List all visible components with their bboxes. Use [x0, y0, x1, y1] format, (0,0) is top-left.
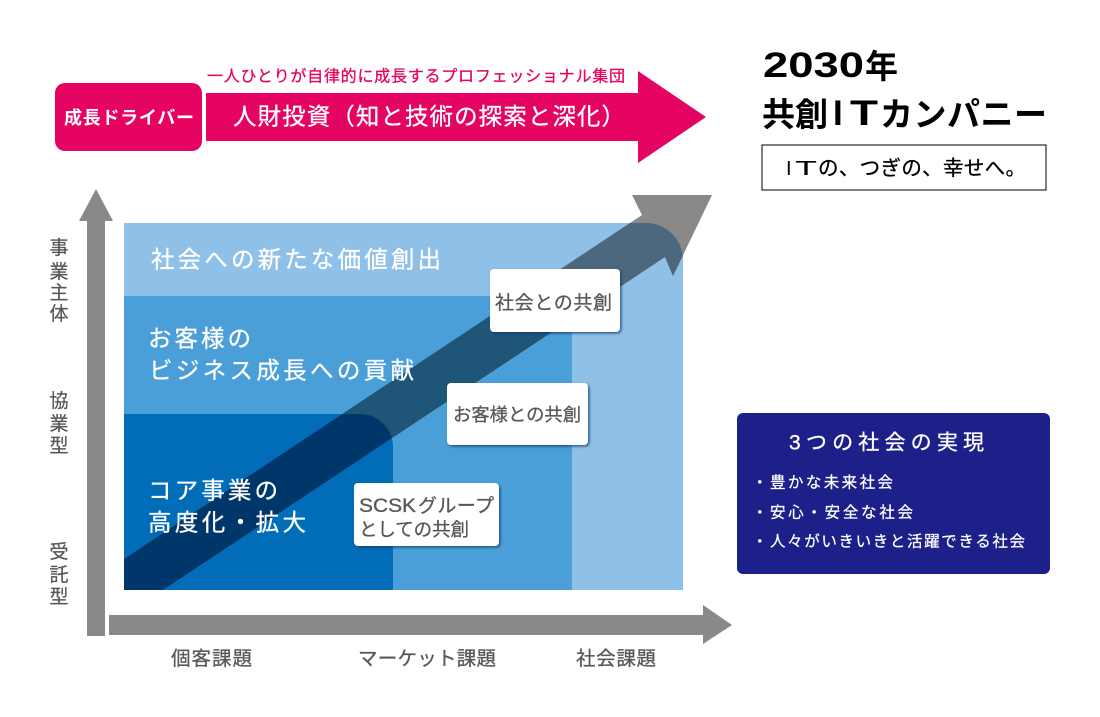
- vertical axis labels: 業: [49, 413, 69, 435]
- heading: core business: [148, 478, 306, 536]
- title: カンパニー: [880, 96, 1047, 133]
- vertical axis arrow: [79, 189, 113, 636]
- horizontal axis labels: 社会課題: [576, 648, 656, 670]
- horizontal axis labels: 個客課題: [171, 648, 252, 670]
- matrix chart: [124, 195, 712, 590]
- block: customer contribution: [124, 296, 572, 590]
- panel heading: 3つの社会の実現: [789, 432, 984, 454]
- heading: social value: 社会への新たな価値創出: [151, 246, 441, 272]
- tagline box: T: [795, 158, 817, 180]
- growth driver arrow: [206, 71, 706, 163]
- horizontal axis labels: [171, 648, 656, 670]
- label: group co-creation: としての共創: [359, 519, 469, 540]
- title: 年: [865, 48, 898, 85]
- list of societies: ・: [752, 504, 768, 522]
- label: group co-creation: [354, 483, 499, 546]
- list of societies: 豊かな未来社会: [770, 474, 893, 492]
- label: co-creation with society: 社会との共創: [495, 292, 612, 314]
- title: I: [833, 94, 843, 133]
- vertical axis labels: [49, 237, 69, 608]
- heading: core business: 高度化・拡大: [148, 510, 306, 536]
- vertical axis labels: 事: [49, 237, 69, 259]
- vertical axis labels: 業: [49, 261, 69, 283]
- label: co-creation with customers: [447, 383, 588, 445]
- heading: core business: コア事業の: [148, 478, 278, 504]
- growth driver label: 成長ドライバー: [64, 107, 194, 128]
- list of societies: ・: [752, 534, 768, 550]
- horizontal axis arrow: [109, 605, 732, 644]
- list of societies: [752, 474, 1025, 550]
- title: T: [850, 94, 878, 133]
- block: social value: [124, 223, 683, 590]
- vertical axis labels: 型: [49, 586, 69, 608]
- vertical axis labels: 託: [49, 564, 69, 586]
- tagline box: I: [786, 158, 792, 180]
- list of societies: 人々がいきいきと活躍できる社会: [770, 532, 1025, 550]
- title: [762, 46, 1047, 133]
- vertical axis labels: 主: [49, 282, 69, 304]
- tagline box: [762, 145, 1046, 190]
- heading: customer contribution: お客様の: [148, 326, 251, 352]
- label: co-creation with customers: お客様との共創: [453, 404, 581, 425]
- growth driver arrow: 人財投資（知と技術の探索と深化）: [233, 104, 625, 130]
- arrow caption: 一人ひとりが自律的に成長するプロフェッショナル集団: [207, 68, 625, 86]
- diagonal growth arrow: [124, 195, 712, 590]
- label: co-creation with society: [490, 269, 620, 332]
- growth driver label: [55, 83, 202, 151]
- vertical axis labels: 型: [49, 435, 69, 457]
- vertical axis labels: 受: [49, 541, 69, 563]
- title: 共創: [762, 96, 828, 133]
- tagline box: の、つぎの、幸せへ。: [818, 157, 1026, 180]
- horizontal axis labels: マーケット課題: [358, 648, 496, 670]
- label: group co-creation: SCSK: [359, 496, 416, 517]
- heading: customer contribution: [148, 326, 414, 384]
- list of societies: ・: [752, 474, 768, 492]
- title: 2030: [763, 46, 864, 85]
- heading: customer contribution: ビジネス成長への貢献: [149, 358, 414, 384]
- vertical axis labels: 協: [49, 390, 69, 412]
- label: group co-creation: グループ: [418, 495, 494, 517]
- panel: three societies: [737, 413, 1050, 574]
- list of societies: 安心・安全な社会: [770, 504, 913, 522]
- vertical axis labels: 体: [49, 303, 69, 325]
- block: core business: [124, 414, 393, 590]
